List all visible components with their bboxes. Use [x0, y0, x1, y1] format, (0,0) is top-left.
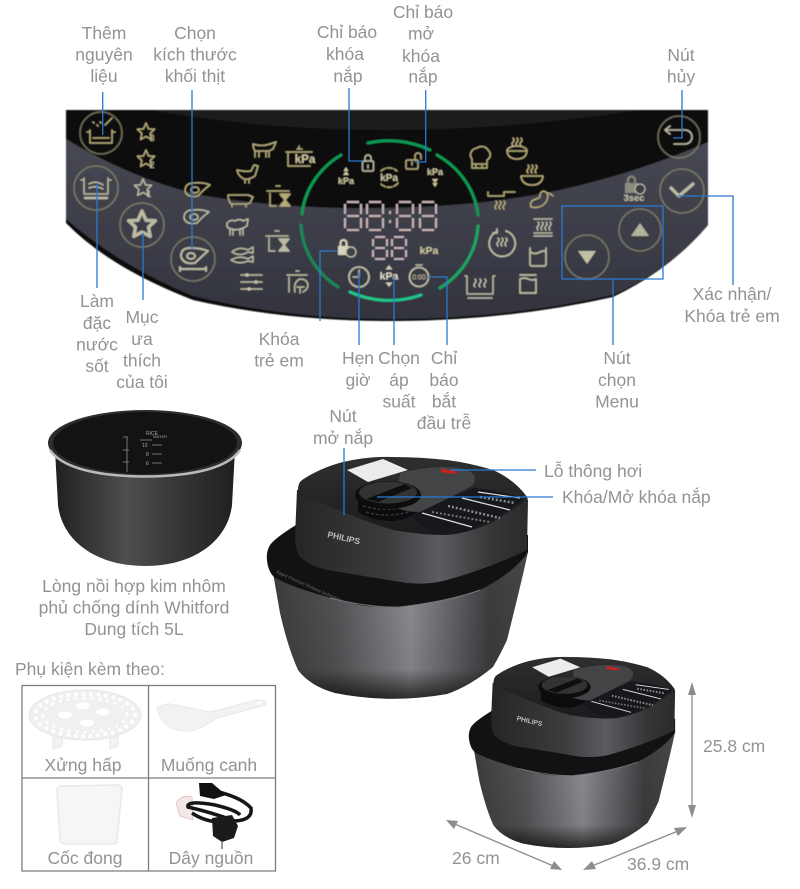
icon: favourite button [120, 203, 164, 247]
callout: timer [342, 273, 374, 390]
icon: favourite star 2: 2 [149, 160, 155, 170]
callout: lid locked indicator: khóa [326, 44, 364, 64]
icon: jar [520, 275, 536, 293]
icon: chef hat [470, 146, 490, 168]
icon: soup bowl [521, 165, 543, 185]
icon: thicken sauce button [74, 166, 118, 210]
kPa label: kPa [420, 245, 438, 257]
icon: menu down button [565, 235, 609, 279]
icon: pot with hourglass [267, 186, 290, 206]
callout: add ingredients: liệu [90, 66, 118, 86]
callout: timer: giờ [345, 370, 371, 390]
small cooker with dimensions [469, 657, 675, 848]
icon: kPa auto cycle [380, 168, 398, 187]
icon: fish [231, 247, 253, 263]
callout: timer: Hẹn [342, 348, 374, 368]
digital display [345, 202, 436, 259]
lid top [298, 457, 528, 535]
callout: cancel button: hủy [667, 66, 695, 86]
knob grip [547, 678, 583, 693]
icon: lid unlocked indicator [406, 153, 421, 169]
pot rim [48, 410, 242, 476]
icon: small meat [184, 210, 209, 223]
vent red mark [440, 468, 457, 474]
icon: pot with steam [287, 271, 308, 293]
callout: add ingredients: nguyên [75, 45, 133, 65]
callout: meat size: kích thước [153, 44, 237, 64]
callout: meat size: khối thịt [165, 66, 225, 86]
lid side [491, 667, 675, 757]
vent handle [570, 665, 633, 700]
callout: thicken sauce: Làm [80, 291, 114, 311]
callout: add ingredients [75, 23, 133, 135]
lid side [295, 470, 528, 584]
callout: my favourites [116, 233, 168, 392]
callout: lid locked indicator: nắp [333, 65, 363, 86]
icon: steam rack [534, 219, 552, 236]
rim highlight [50, 450, 240, 476]
callout: thicken sauce [76, 183, 118, 376]
icon: pot with hourglass lower [266, 231, 289, 251]
callout: menu buttons: Menu [595, 392, 639, 412]
icon: kPa up: kPa [338, 176, 355, 186]
water scale markings [123, 431, 167, 472]
knob top [359, 482, 417, 504]
width label: 36.9 cm [627, 854, 689, 874]
callout: my favourites: Mục [125, 307, 159, 327]
icon: chicken [237, 165, 258, 183]
icon: menu up button [619, 209, 661, 251]
knob stem [358, 495, 420, 521]
icon: favourite star 3: 3 [149, 133, 155, 143]
icon: kPa up [338, 167, 355, 186]
vent handle [395, 467, 475, 512]
accessories heading: Phụ kiện kèm theo: [15, 659, 165, 679]
callout: lid open button: mở nắp [313, 427, 373, 448]
callout: menu buttons: chọn [598, 370, 636, 390]
base shading [474, 732, 675, 848]
callout: lid lock knob: Khóa/Mở khóa nắp [562, 486, 711, 507]
icon: confirm button [660, 169, 704, 213]
callout: select pressure: áp [389, 370, 409, 390]
icon: pressure pot: kPa [295, 154, 316, 166]
panel markings [591, 685, 669, 712]
callout: lid locked indicator: Chỉ báo [317, 22, 377, 42]
callout: lid open button: Nút [329, 406, 357, 426]
callout: lid unlocked indicator: nắp [408, 66, 438, 86]
callout: my favourites: ưa [131, 329, 153, 349]
water scale markings: 6 [146, 461, 149, 467]
callout: delayed start: bắt [432, 390, 456, 412]
knob stem [541, 687, 590, 708]
icon: cup [530, 248, 546, 266]
callout: lid open button [313, 406, 373, 515]
green ring [301, 141, 478, 300]
water scale markings: WATER [153, 434, 167, 439]
lock knob [355, 481, 421, 509]
rim text: Rapid Pressure Release technology [276, 569, 344, 603]
lock knob [538, 676, 591, 698]
icon: power cord [176, 783, 251, 849]
vent red mark [606, 666, 619, 670]
stem ribs [363, 503, 416, 515]
brand name: PHILIPS [516, 715, 543, 728]
callout: cancel button: Nút [667, 45, 695, 65]
callout: lid unlocked indicator [393, 2, 453, 162]
callout: my favourites: thích [123, 350, 161, 370]
callout: meat size [153, 23, 237, 250]
callout: select pressure: suất [382, 392, 416, 412]
cord label: Dây nguồn [169, 848, 253, 868]
spoon label: Muống canh [161, 755, 257, 775]
panel markings [422, 492, 520, 527]
icon: timer clock [349, 267, 369, 287]
icon: favourite star 2 [137, 150, 155, 170]
callout: select pressure: Chọn [378, 348, 420, 368]
icon: delayed start [410, 265, 428, 286]
icon: kPa auto cycle: kPa [380, 173, 398, 184]
icon: kPa adjust [380, 265, 398, 287]
top dark arc [150, 110, 640, 130]
icon: hold 3 seconds lock [623, 176, 645, 204]
icon: keep warm cycle [489, 229, 515, 256]
panel: accessories table [22, 686, 276, 871]
callout: meat size: Chọn [174, 23, 216, 43]
water scale markings: RICE [146, 431, 159, 437]
callout: lid unlocked indicator: khóa [402, 46, 440, 66]
control panel on lid [410, 488, 524, 534]
icon: sheep [227, 219, 248, 235]
inner pot caption: phủ chống dính Whitford [39, 598, 229, 618]
callout: confirm and child lock: Khóa trẻ em [684, 306, 780, 326]
icon: favourite star 1: 1 [146, 189, 152, 199]
grey glass area [66, 139, 708, 319]
cup label: Cốc đong [48, 848, 122, 868]
icon: pot with steam base [465, 276, 495, 298]
inner pot [48, 410, 242, 566]
icon: measuring cup [57, 785, 122, 844]
icon: favourite star 1 [134, 179, 152, 199]
control panel on lid [582, 682, 672, 718]
cooker base body [273, 552, 528, 699]
icon: pig [228, 195, 253, 207]
icon: bean [531, 191, 553, 207]
arrow: width dimension [583, 827, 687, 870]
callout: steam vent: Lỗ thông hơi [544, 460, 642, 481]
callout: lid locked indicator [317, 22, 377, 161]
callout: cancel button [667, 45, 695, 138]
callout: child lock: Khóa [259, 329, 299, 349]
callout: child lock: trẻ em [254, 350, 304, 370]
rim highlight [330, 590, 480, 607]
icon: settings sliders [241, 273, 262, 291]
icon: rice bowl [507, 138, 527, 159]
base shading [273, 552, 528, 699]
inner pot caption: Dung tích 5L [84, 619, 184, 639]
callout: add ingredients: Thêm [82, 23, 126, 43]
callout: confirm and child lock [678, 196, 780, 326]
icon: child lock [338, 240, 356, 257]
panel background [66, 110, 708, 321]
icon: kPa adjust: kPa [380, 270, 398, 282]
icon: favourite star 3 [137, 123, 155, 143]
black rim [267, 515, 528, 607]
lid top [493, 657, 675, 719]
arrow: depth dimension [446, 820, 562, 870]
callout: thicken sauce: đặc [83, 313, 111, 333]
icon: lid locked indicator [362, 155, 374, 171]
knob grip [366, 484, 412, 502]
icon: soup spoon [157, 700, 266, 731]
icon: cow [253, 142, 276, 157]
arrow: height dimension [688, 682, 696, 818]
callout: delayed start: đầu trễ [417, 412, 471, 433]
brand name: PHILIPS [327, 529, 361, 546]
knob top [542, 676, 587, 694]
callout: delayed start: Chỉ [431, 348, 457, 368]
icon: kPa down [427, 167, 444, 187]
callout: menu buttons: Nút [603, 348, 631, 368]
callout: delayed start: báo [429, 370, 459, 390]
rim highlight [519, 762, 637, 776]
water scale markings: 8 [146, 452, 149, 458]
callout: menu buttons [562, 206, 663, 412]
icon: pressure pot [286, 146, 316, 166]
height label: 25.8 cm [703, 736, 765, 756]
icon: hold 3 seconds lock: 3sec [623, 193, 645, 204]
icon: delayed start: 0:00 [412, 274, 426, 282]
black rim [469, 703, 675, 776]
callout: confirm and child lock: Xác nhận/ [693, 284, 771, 304]
callout: delayed start [417, 277, 471, 433]
callout: thicken sauce: sốt [85, 356, 109, 376]
callout: my favourites: của tôi [116, 372, 168, 392]
icon: frying pan [488, 192, 515, 209]
callout: child lock [254, 251, 338, 370]
sticker [532, 659, 580, 677]
sticker [347, 459, 408, 482]
callout: lid unlocked indicator: mở [408, 24, 434, 44]
icon: meat size button [171, 237, 215, 281]
icon: large meat [185, 183, 210, 196]
icon: kPa down: kPa [427, 167, 444, 177]
pot interior [53, 412, 237, 474]
callout: lid unlocked indicator: Chỉ báo [393, 2, 453, 22]
icon: steamer rack [29, 690, 141, 749]
large cooker [267, 457, 528, 699]
pot body [55, 450, 235, 566]
icon: cancel button [658, 116, 700, 158]
steamer label: Xửng hấp [45, 755, 121, 775]
callout: thicken sauce: nước [76, 334, 118, 354]
icon: add ingredients button [80, 112, 122, 154]
panel: control panel close-up [66, 110, 708, 321]
water scale markings: 10 [142, 443, 148, 449]
callout: select pressure [378, 277, 420, 412]
cooker base body [474, 732, 675, 848]
depth label: 26 cm [452, 848, 500, 868]
inner pot caption: Lòng nồi hợp kim nhôm [42, 576, 226, 596]
